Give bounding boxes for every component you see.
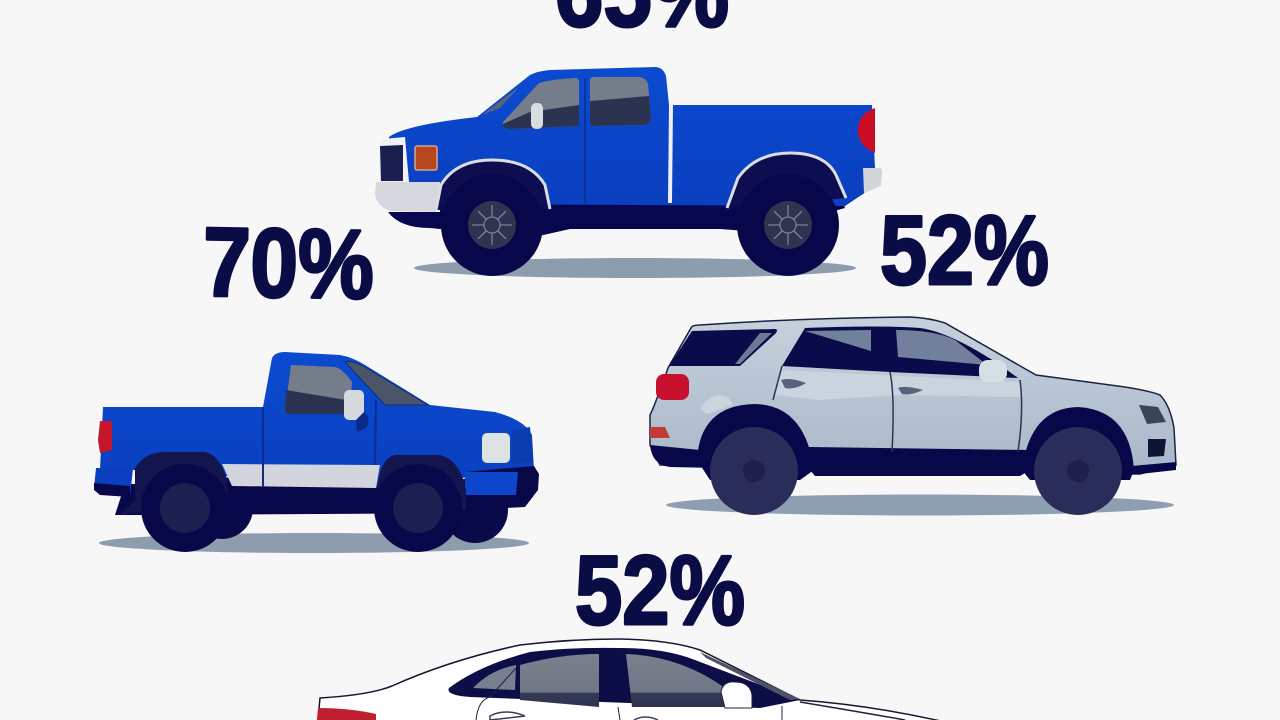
rear bumper bbox=[863, 168, 882, 193]
front window bbox=[503, 78, 579, 129]
body bbox=[650, 317, 1176, 474]
hood line bbox=[800, 702, 905, 720]
front bumper bbox=[465, 466, 539, 510]
front wheel bbox=[1034, 427, 1122, 515]
window frame bbox=[448, 648, 800, 708]
front door glass bbox=[896, 330, 987, 365]
front arch bbox=[377, 455, 466, 510]
front bumper bbox=[375, 182, 440, 212]
rear arch bbox=[120, 452, 228, 515]
tail lamp bbox=[98, 421, 112, 453]
upper body highlight bbox=[775, 370, 1022, 400]
percentage: 70% left: 70% bbox=[202, 207, 375, 319]
side window lower tint bbox=[285, 390, 350, 414]
tail lamp bbox=[656, 374, 689, 400]
headlight bbox=[1139, 405, 1166, 424]
windshield bbox=[700, 652, 800, 700]
door outline bbox=[263, 400, 376, 465]
door handles bbox=[490, 712, 525, 720]
shadow bbox=[414, 258, 856, 278]
mirror bbox=[721, 682, 752, 708]
percentage: 52% bottom: 52% bbox=[575, 535, 745, 645]
mirror bbox=[979, 360, 1007, 382]
fog lamp bbox=[1148, 439, 1166, 457]
mirror bbox=[531, 103, 543, 129]
rear door glass bbox=[805, 330, 871, 351]
body bbox=[100, 352, 534, 488]
front window lower tint bbox=[503, 105, 579, 129]
front inner wheel bbox=[442, 477, 508, 543]
fuel door bbox=[700, 395, 733, 414]
shadow bbox=[666, 494, 1174, 516]
rear bumper bbox=[94, 468, 133, 497]
shadow bbox=[99, 533, 529, 553]
side window bbox=[285, 365, 352, 414]
rear arch bbox=[697, 404, 814, 480]
vehicle: white sedan bbox=[317, 639, 945, 720]
front arch trim bbox=[436, 160, 550, 210]
rear door glass bbox=[520, 654, 599, 707]
grille bbox=[379, 137, 409, 182]
amber lamp bbox=[415, 146, 437, 170]
grille bbox=[512, 427, 533, 464]
windshield sliver bbox=[482, 86, 520, 115]
cab door line bbox=[584, 78, 586, 203]
front wheel bbox=[441, 174, 543, 276]
mirror bbox=[344, 390, 364, 420]
vehicle: blue extended-cab pickup bbox=[375, 67, 882, 278]
rear window lower tint bbox=[590, 96, 651, 126]
chassis bbox=[388, 200, 845, 238]
side window frame bbox=[782, 326, 1018, 378]
body bbox=[389, 67, 875, 206]
tail lamp bbox=[317, 708, 376, 720]
front door glass bbox=[626, 654, 725, 707]
body bbox=[317, 639, 945, 720]
rear window bbox=[590, 77, 651, 126]
rear wheel bbox=[710, 427, 798, 515]
chassis bbox=[650, 445, 1176, 476]
vehicle: silver SUV bbox=[650, 317, 1176, 516]
silver sill bbox=[222, 464, 380, 488]
rear inner wheel bbox=[191, 477, 253, 539]
rear wheel bbox=[737, 174, 839, 276]
front wheel bbox=[374, 464, 462, 552]
headlight bbox=[482, 433, 510, 463]
cab white strip bbox=[668, 105, 673, 203]
tail lamp bbox=[858, 108, 875, 153]
chassis bbox=[115, 484, 505, 515]
quarter glass bbox=[473, 665, 516, 690]
rear wheel bbox=[141, 464, 229, 552]
door handles bbox=[781, 379, 806, 388]
door lines bbox=[773, 366, 1022, 452]
percentage: 52% right: 52% bbox=[880, 195, 1049, 305]
lower reflector bbox=[650, 427, 670, 438]
front arch bbox=[1022, 407, 1134, 480]
rear arch trim bbox=[727, 153, 846, 208]
door lines bbox=[476, 668, 782, 720]
rear window bbox=[669, 329, 777, 366]
windshield bbox=[345, 362, 428, 405]
vehicle: blue regular-cab pickup bbox=[94, 352, 539, 553]
